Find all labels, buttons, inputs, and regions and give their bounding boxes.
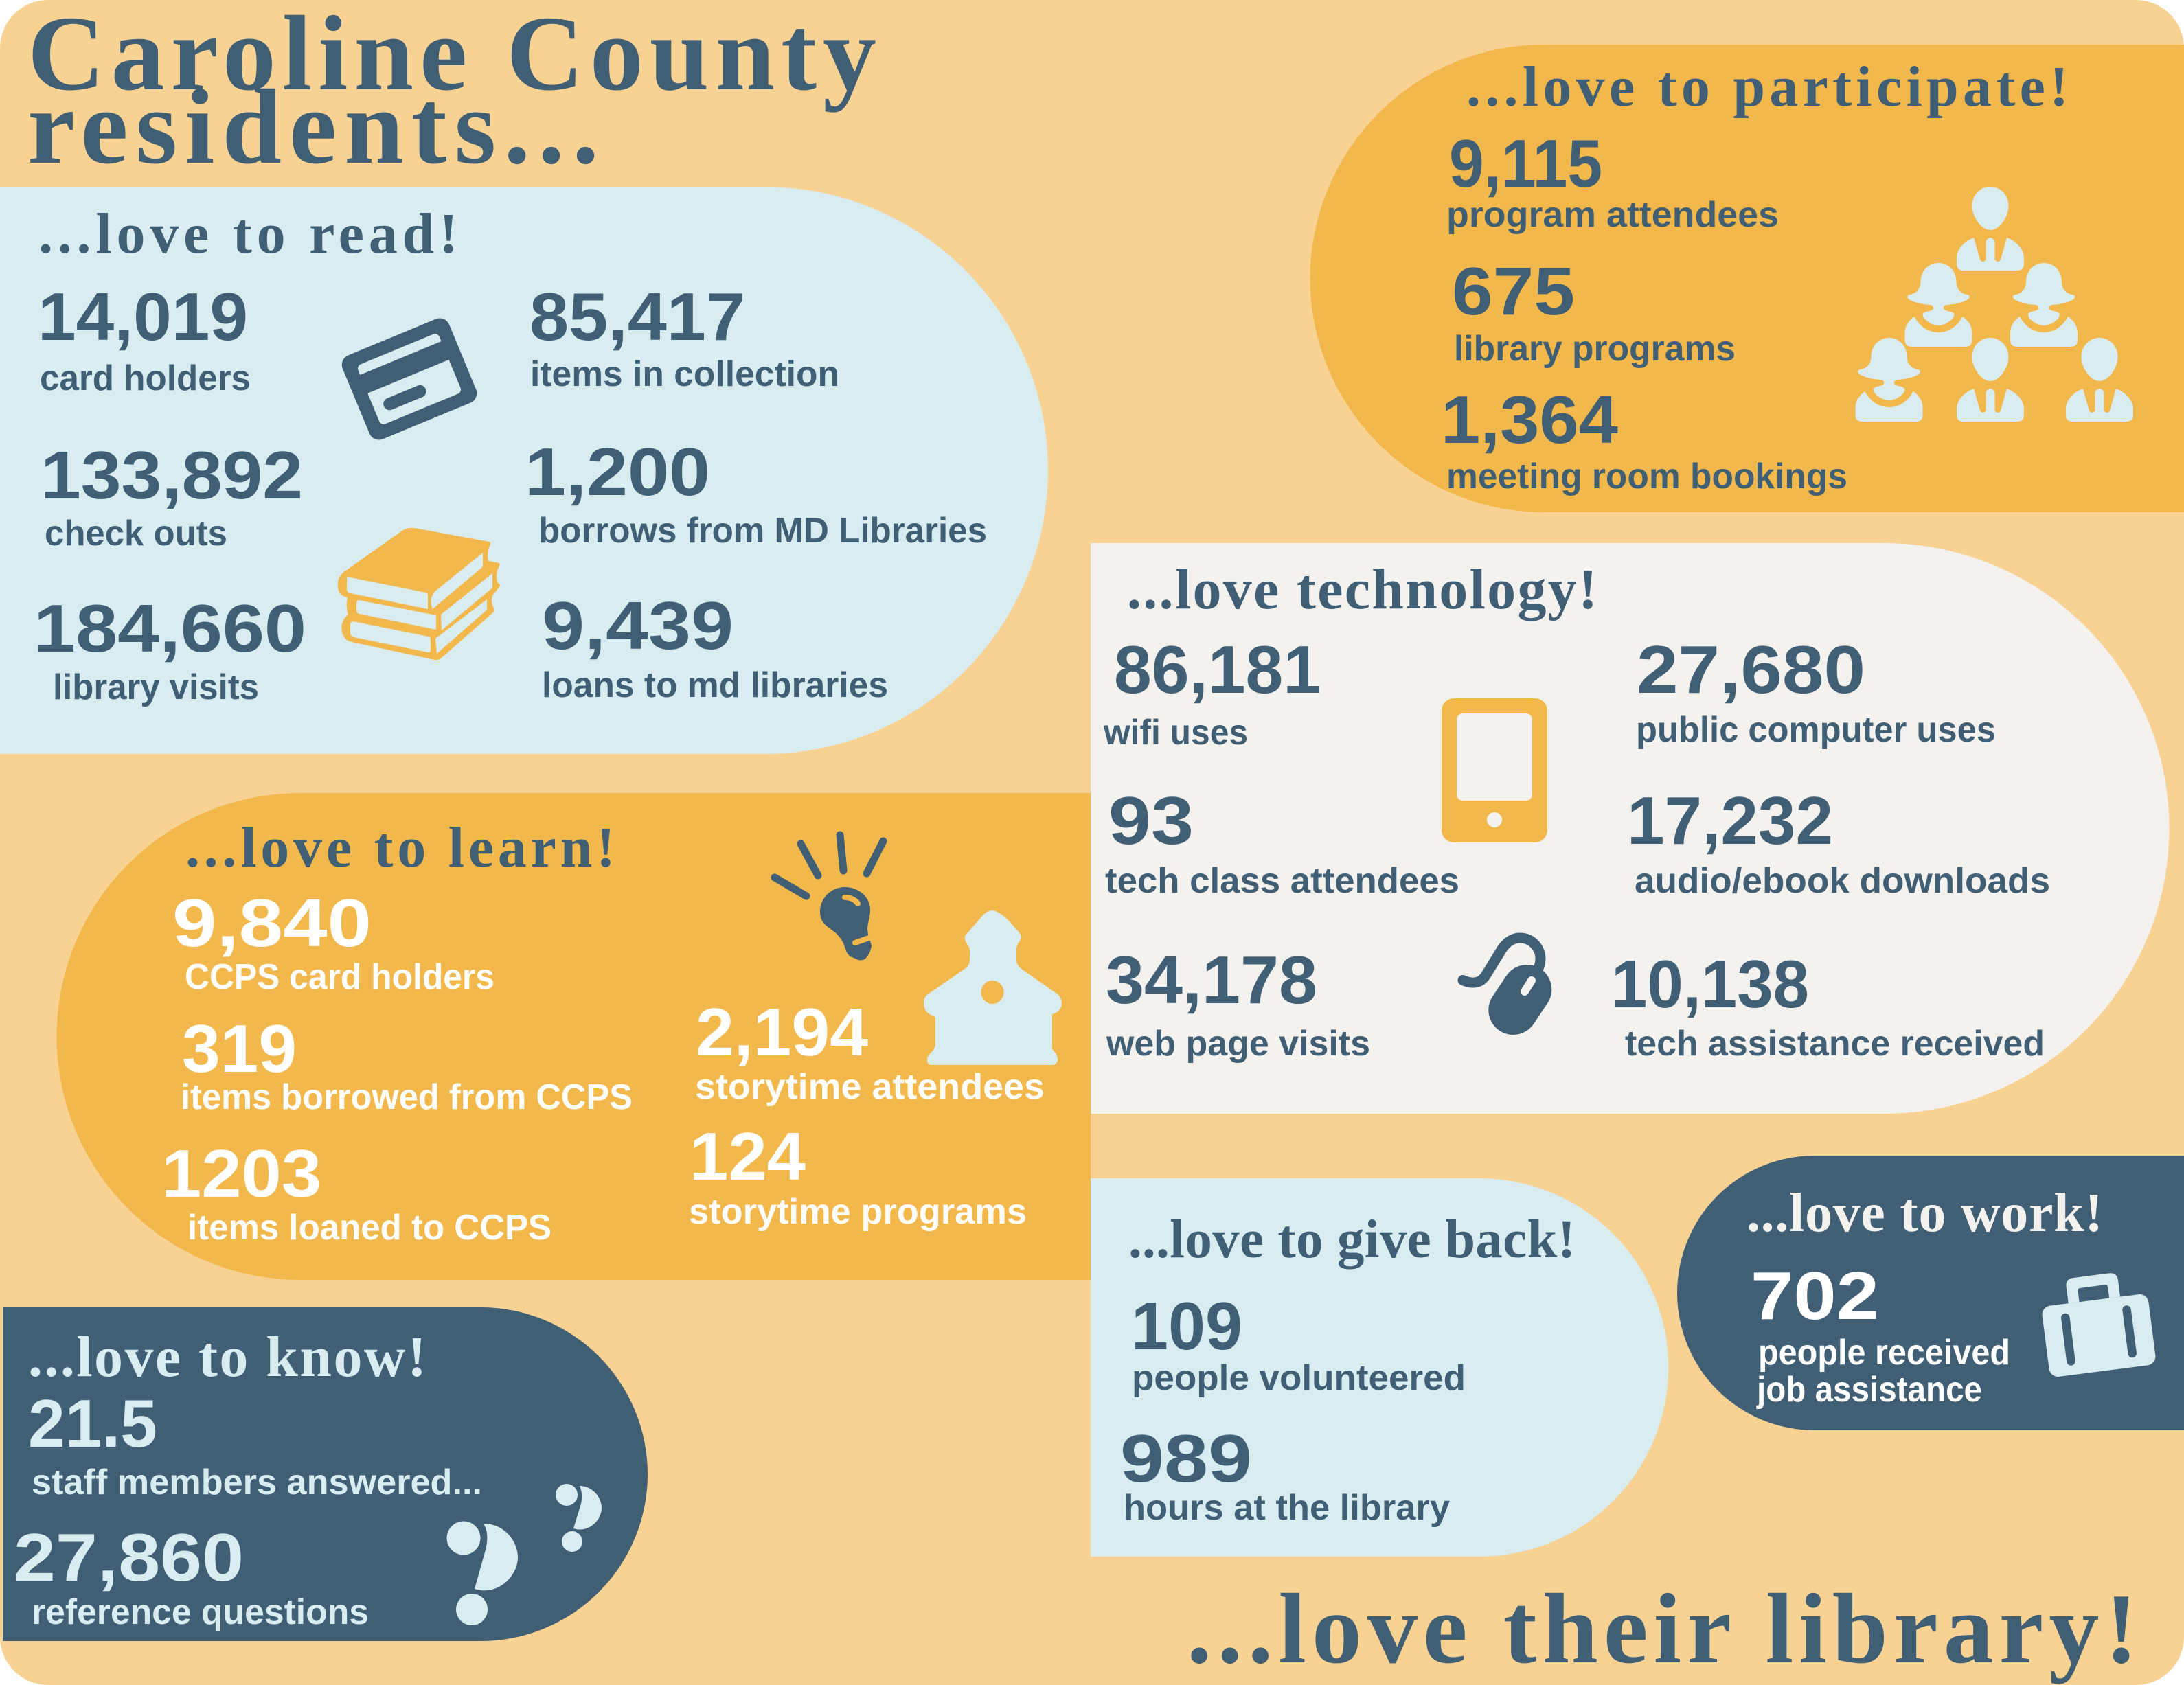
- stat: program attendees: program attendees: [1446, 195, 1779, 235]
- stat: web page visits: [1106, 942, 1370, 1064]
- stat: library visits: 184,660: [34, 591, 306, 666]
- stat: borrows from MD Libraries: 1,200: [525, 434, 710, 509]
- panel: love to participate: [1310, 45, 2184, 512]
- heading: love to participate: ...love to participate!: [1466, 55, 2069, 119]
- stat: job assistance: [1751, 1258, 2010, 1410]
- stat: staff members: staff members answered...: [32, 1463, 482, 1502]
- stat: CCPS card holders: 9,840: [172, 885, 372, 961]
- stat: storytime attendees: storytime attendees: [695, 1067, 1045, 1107]
- stat: meeting room bookings: [1441, 382, 1847, 496]
- panel: love to know: [3, 1307, 648, 1641]
- title: Caroline County residents: residents...: [27, 67, 599, 186]
- stat: storytime attendees: [695, 994, 1045, 1107]
- stat: storytime programs: [689, 1119, 1027, 1232]
- stat: people volunteered: [1131, 1288, 1466, 1398]
- panel: love technology: [1091, 543, 2170, 1114]
- stat: public computer uses: [1636, 632, 1996, 750]
- stat: items in collection: [530, 279, 839, 394]
- stat: wifi uses: wifi uses: [1103, 713, 1248, 753]
- stat: items loaned to CCPS: [161, 1136, 551, 1248]
- panel: love to give back: [1091, 1178, 1668, 1557]
- stat: card holders: card holders: [40, 358, 251, 398]
- stat: meeting room bookings: 1,364: [1441, 382, 1618, 457]
- stat: reference questions: [14, 1520, 369, 1632]
- icon: tablet: [1442, 698, 1547, 842]
- stat: staff members: [28, 1386, 482, 1502]
- stat: CCPS card holders: CCPS card holders: [185, 957, 494, 997]
- stat: tech class attendees: [1105, 783, 1459, 901]
- stat: hours at the library: hours at the library: [1124, 1488, 1450, 1528]
- give back panel shape: [1091, 1178, 1668, 1557]
- icon: large question mark: [446, 1522, 518, 1625]
- stat: staff members: 21.5: [28, 1386, 157, 1461]
- stat: tech assistance received: tech assistance received: [1625, 1024, 2045, 1064]
- stat: tech class attendees: tech class attendees: [1105, 861, 1459, 901]
- icon: computer mouse: [1463, 938, 1540, 1010]
- stat: borrows from MD Libraries: [525, 434, 987, 551]
- stat: items in collection: items in collection: [530, 354, 839, 394]
- stat: library visits: library visits: [53, 667, 259, 707]
- stat: items loaned to CCPS: 1203: [161, 1136, 321, 1211]
- icon: group of people: [1856, 187, 2133, 422]
- participate panel shape: [1310, 45, 2184, 512]
- work panel shape: [1677, 1156, 2184, 1430]
- stat: reference questions: reference questions: [32, 1592, 369, 1632]
- stat: hours at the library: 989: [1120, 1421, 1252, 1496]
- stat: check outs: check outs: [45, 514, 227, 553]
- panel: love to work: [1677, 1156, 2184, 1430]
- learn panel shape: [57, 793, 1091, 1280]
- stat: library programs: 675: [1452, 253, 1575, 329]
- icon: small question mark: [556, 1484, 602, 1552]
- icon: library card: [339, 315, 480, 443]
- stat: public computer uses: public computer uses: [1636, 710, 1996, 750]
- stat: check outs: [41, 437, 303, 553]
- heading: love to give back: ...love to give back!: [1128, 1210, 1576, 1270]
- stat: program attendees: [1446, 126, 1779, 235]
- stat: library programs: library programs: [1454, 329, 1736, 369]
- stat: loans to md libraries: loans to md libraries: [542, 665, 888, 705]
- stat: items borrowed from CCPS: [181, 1011, 633, 1117]
- read panel shape: [0, 187, 1048, 754]
- stat: tech class attendees: 93: [1108, 783, 1194, 858]
- stat: items borrowed from CCPS: items borrowed from CCPS: [181, 1077, 633, 1117]
- stat: tech assistance received: 10,138: [1611, 946, 1809, 1022]
- stat: web page visits: web page visits: [1106, 1024, 1370, 1064]
- stat: items borrowed from CCPS: 319: [182, 1011, 297, 1086]
- stat: card holders: [38, 279, 251, 398]
- stat: audio/ebook downloads: [1627, 783, 2050, 901]
- icon: light bulb: [775, 835, 883, 960]
- stat: wifi uses: [1103, 632, 1321, 753]
- panel: love to read: [0, 187, 1048, 754]
- panel: love to learn: [57, 793, 1091, 1280]
- stat: people volunteered: people volunteered: [1132, 1358, 1466, 1398]
- title: Caroline County residents: [27, 0, 876, 186]
- stat: meeting room bookings: meeting room bookings: [1446, 457, 1847, 496]
- heading: love to learn: ...love to learn!: [185, 816, 615, 880]
- stat: card holders: 14,019: [38, 279, 248, 354]
- stat: library programs: [1452, 253, 1736, 369]
- stat: loans to md libraries: [542, 588, 888, 705]
- icon: stack of books: [338, 528, 500, 660]
- stat: library visits: [34, 591, 306, 707]
- stat: job assistance: job assistance: [1756, 1370, 1982, 1410]
- stat: web page visits: 34,178: [1106, 942, 1317, 1018]
- stat: hours at the library: [1120, 1421, 1450, 1528]
- technology panel shape: [1091, 543, 2170, 1114]
- stat: people volunteered: 109: [1131, 1288, 1242, 1364]
- stat: items loaned to CCPS: items loaned to CCPS: [187, 1208, 551, 1248]
- icon: suitcase: [2038, 1269, 2157, 1377]
- stat: audio/ebook downloads: 17,232: [1627, 783, 1833, 858]
- stat: check outs: 133,892: [41, 437, 303, 513]
- stat: tech assistance received: [1611, 946, 2045, 1064]
- closing tagline: love their library: ...love their library!: [1187, 1573, 2138, 1684]
- stat: storytime programs: storytime programs: [689, 1192, 1027, 1232]
- heading: love technology: ...love technology!: [1127, 558, 1597, 621]
- heading: love to read: ...love to read!: [38, 202, 458, 266]
- stat: audio/ebook downloads: audio/ebook downloads: [1635, 861, 2050, 901]
- stat: job assistance: 702: [1751, 1258, 1879, 1333]
- stat: wifi uses: 86,181: [1114, 632, 1321, 707]
- stat: program attendees: 9,115: [1449, 126, 1602, 201]
- heading: love to work: ...love to work!: [1747, 1183, 2103, 1243]
- stat: loans to md libraries: 9,439: [542, 588, 733, 663]
- stat: reference questions: 27,860: [14, 1520, 244, 1595]
- stat: job assistance: people received: [1758, 1333, 2010, 1373]
- stat: items in collection: 85,417: [530, 279, 745, 354]
- stat: public computer uses: 27,680: [1637, 632, 1865, 707]
- stat: borrows from MD Libraries: borrows from MD Libraries: [538, 511, 987, 551]
- stat: storytime attendees: 2,194: [696, 994, 868, 1070]
- know panel shape: [3, 1307, 648, 1641]
- heading: love to know: ...love to know!: [28, 1325, 426, 1389]
- stat: storytime programs: 124: [690, 1119, 806, 1194]
- icon: schoolhouse: [924, 910, 1062, 1065]
- stat: CCPS card holders: [172, 885, 494, 997]
- learn stats: [161, 885, 1045, 1248]
